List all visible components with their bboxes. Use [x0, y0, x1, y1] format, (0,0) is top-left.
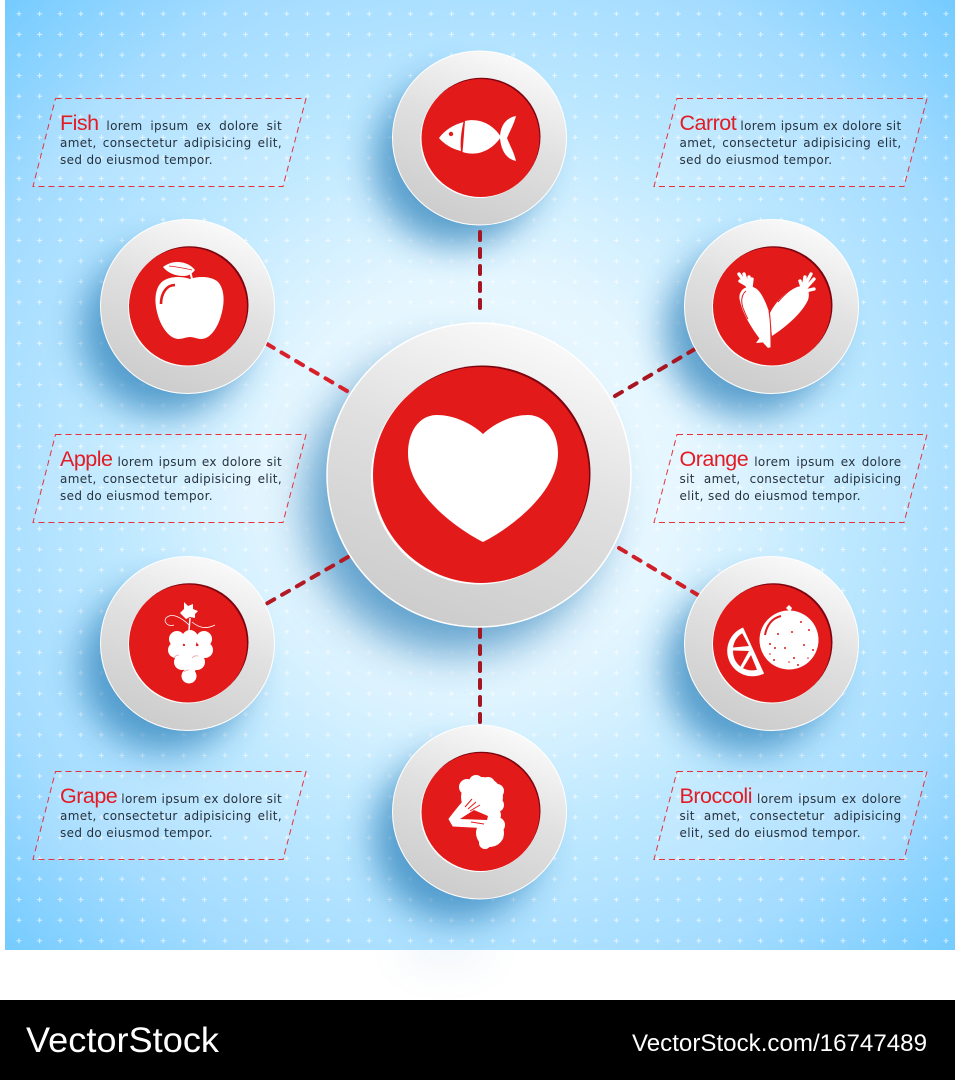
disc: apple	[100, 220, 274, 394]
panel: apple	[32, 434, 307, 523]
icon: heart	[408, 415, 558, 542]
disc: carrot	[684, 220, 858, 394]
panel: orange	[653, 434, 928, 523]
panel: apple: amet, consectetur adipisicing elit,	[60, 472, 282, 486]
disc: broccoli	[392, 725, 566, 899]
panel: fish: Fish lorem ipsum ex dolore sit	[60, 111, 282, 135]
panel: carrot: sed do eiusmod tempor.	[680, 153, 832, 167]
panel: grape	[32, 771, 307, 860]
footer bar	[0, 1000, 955, 1080]
panel: broccoli: sit amet, consectetur adipisicing	[680, 809, 902, 823]
icon: orange and slice	[727, 605, 818, 676]
panel: broccoli: Broccoli lorem ipsum ex dolore	[680, 784, 902, 808]
disc: fish	[392, 51, 566, 225]
faint shadow under the background	[395, 925, 495, 975]
icon: apple	[155, 262, 224, 339]
panel: fish	[32, 98, 307, 187]
icon: grapes	[165, 602, 215, 684]
panel: carrot: Carrot lorem ipsum ex dolore sit	[680, 111, 902, 135]
panel: grape: amet, consectetur adipisicing elit,	[60, 809, 282, 823]
disc: orange	[684, 556, 858, 730]
dashed connector lines	[266, 232, 698, 724]
panel: grape: Grape lorem ipsum ex dolore sit	[60, 784, 282, 808]
central disc with heart	[327, 323, 631, 627]
panel: broccoli	[653, 771, 928, 860]
panel: orange: elit, sed do eiusmod tempor.	[680, 489, 861, 503]
disc: grape	[100, 556, 274, 730]
disc shadows	[81, 78, 833, 921]
panel: fish: sed do eiusmod tempor.	[60, 153, 213, 167]
panel: carrot	[653, 98, 928, 187]
panel: orange: sit amet, consectetur adipisicing	[680, 472, 902, 486]
panel: grape: sed do eiusmod tempor.	[60, 826, 213, 840]
panel: orange: Orange lorem ipsum ex dolore	[680, 447, 902, 471]
icon: carrots	[739, 274, 814, 348]
footer url: VectorStock.com/16747489	[632, 1030, 927, 1057]
panel: apple: sed do eiusmod tempor.	[60, 489, 213, 503]
panel: carrot: amet, consectetur adipisicing elit,	[680, 136, 902, 150]
icon: fish	[439, 116, 516, 161]
footer brand: VectorStock	[26, 1021, 220, 1060]
icon: broccoli	[449, 775, 505, 849]
panel: broccoli: elit, sed do eiusmod tempor.	[680, 826, 861, 840]
panel: fish: amet, consectetur adipisicing elit,	[60, 136, 282, 150]
panel: apple: Apple lorem ipsum ex dolore sit	[60, 447, 282, 471]
